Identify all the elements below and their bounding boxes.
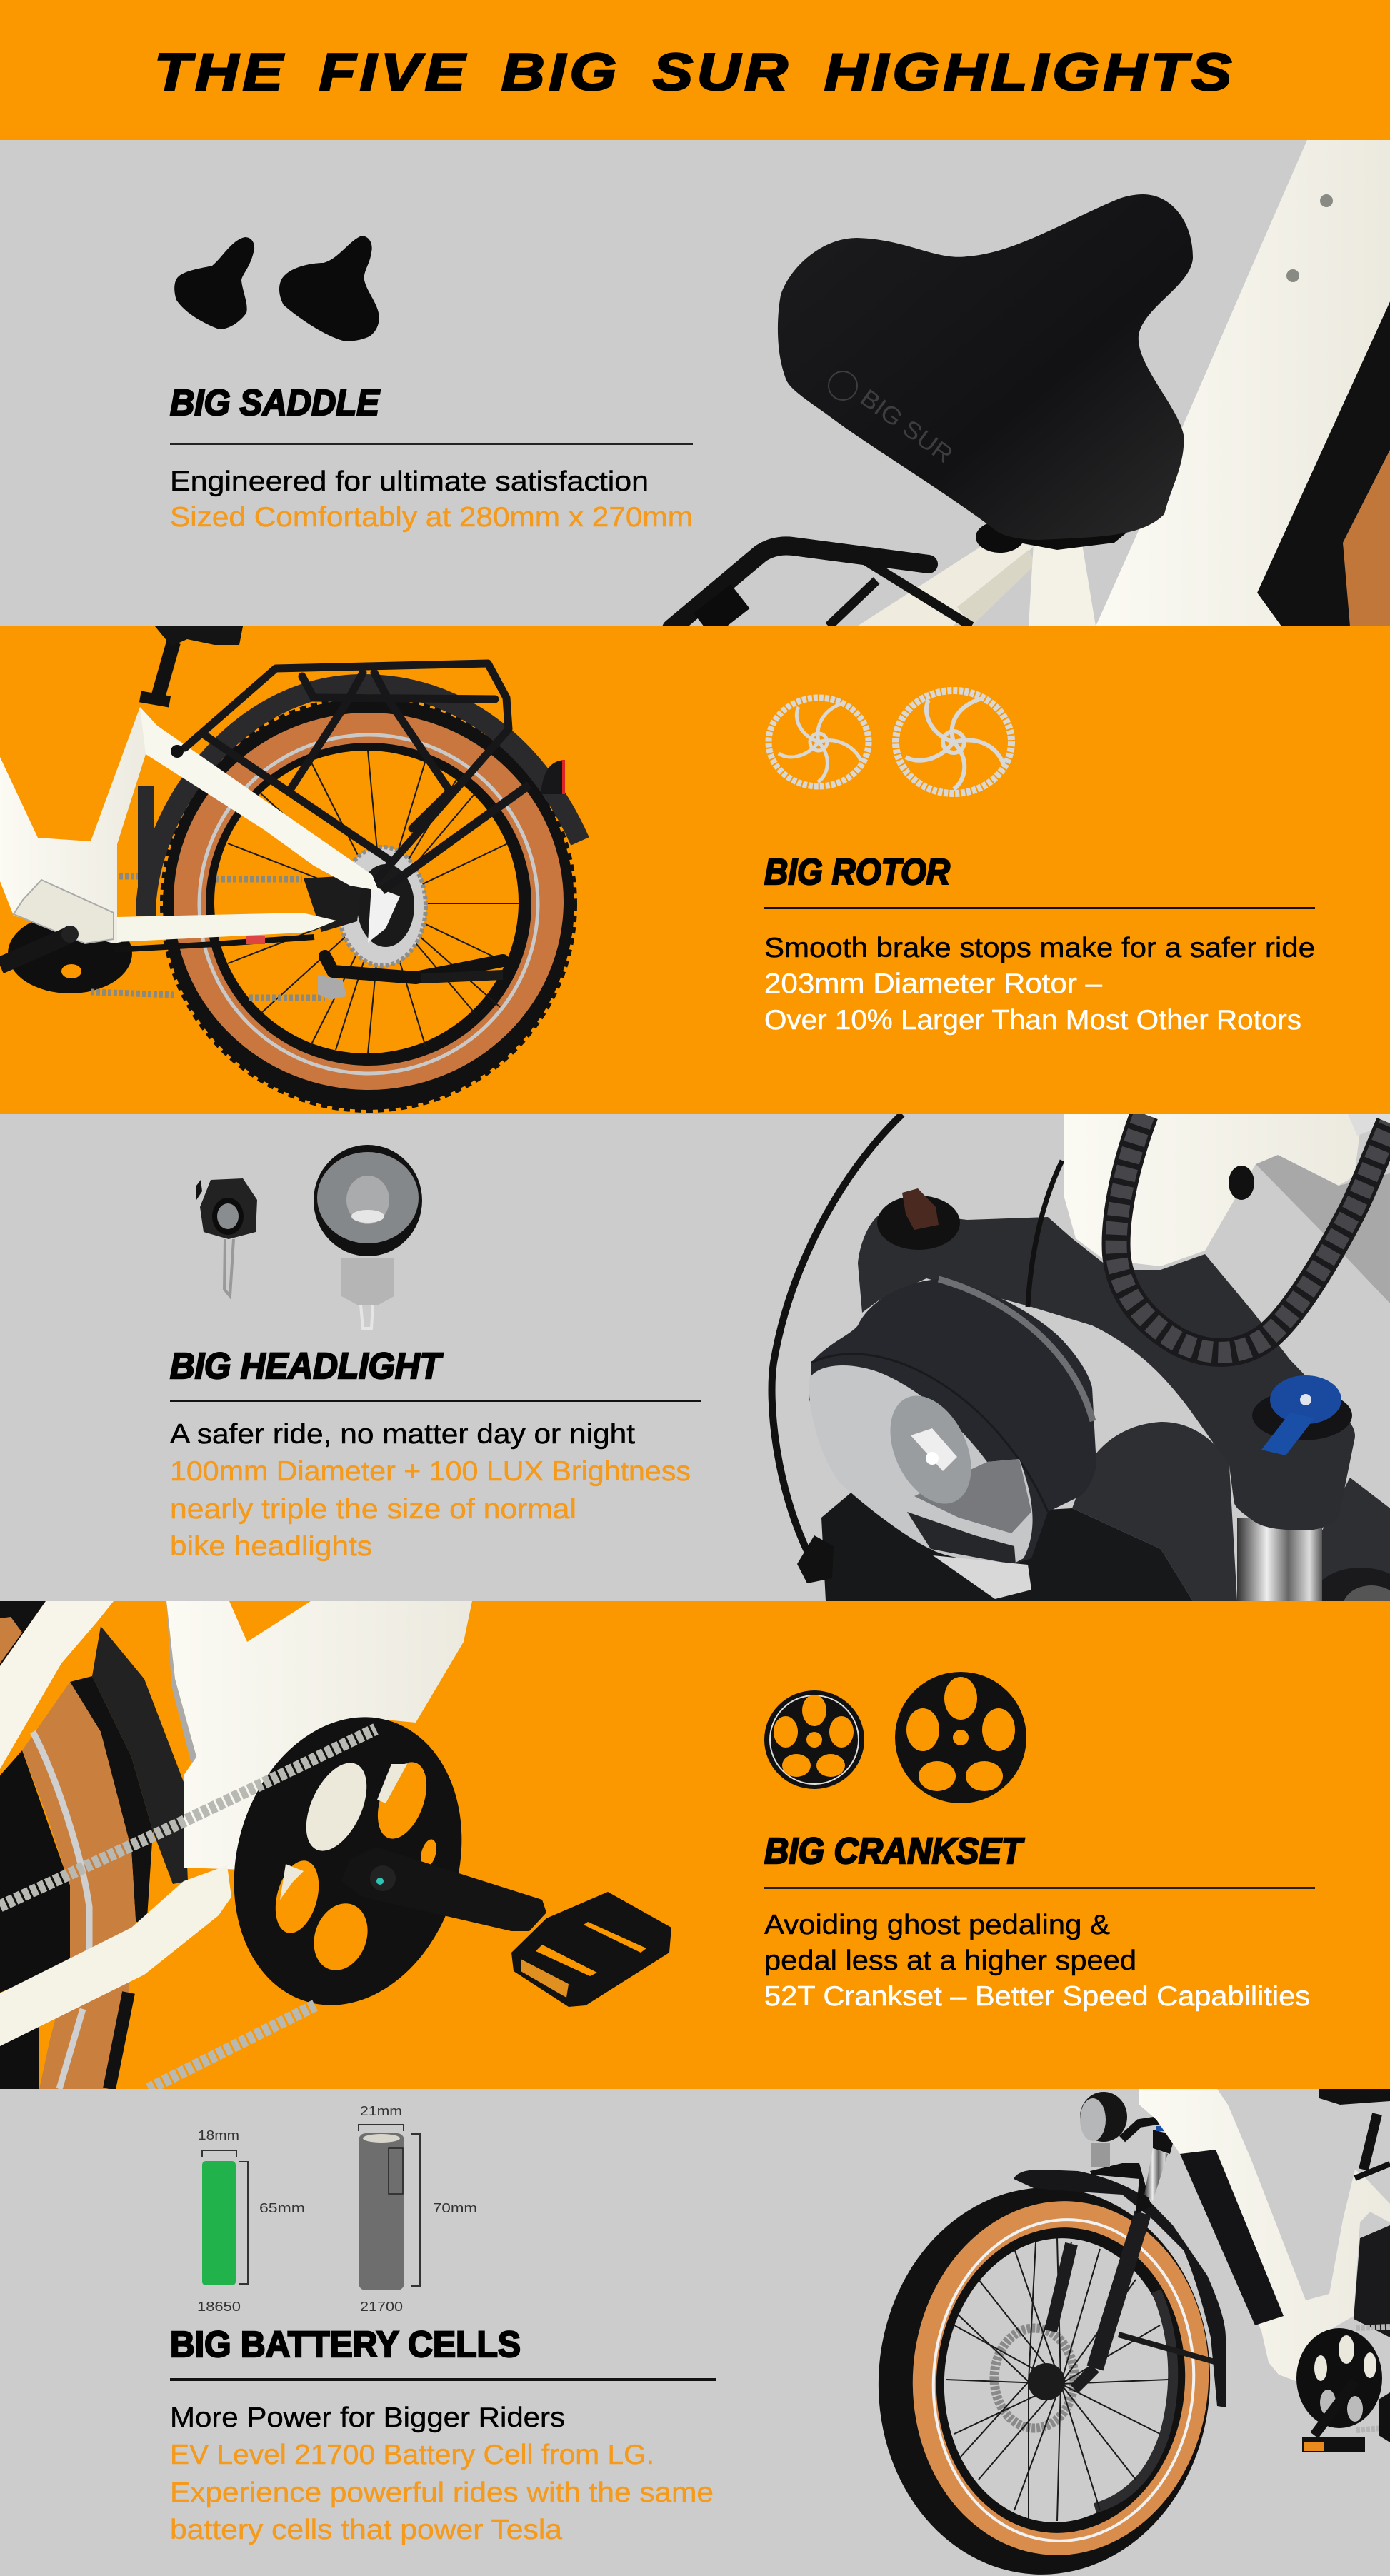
icon: small saddles [174, 236, 379, 341]
text: rotor description: Over 10% Larger Than Most Other Rotors [764, 1005, 1301, 1036]
text: rotor description: 203mm Diameter Rotor – [764, 968, 1102, 999]
icon: 21700 battery cell: 21mm [360, 2104, 402, 2118]
text: rotor description [764, 933, 1315, 1036]
text: rotor description: Smooth brake stops make for a safer ride [764, 933, 1315, 963]
text: crankset description: pedal less at a higher speed [764, 1945, 1136, 1976]
text: saddle description [170, 466, 693, 533]
panel: big rotor [0, 626, 1390, 1114]
photo: saddle on bike frame: BIG SUR [855, 384, 958, 469]
heading: big crankset: BIG CRANKSET [764, 1830, 1025, 1871]
icon: 21700 battery cell [359, 2104, 477, 2314]
panel: big headlight [170, 1114, 1390, 1601]
photo: headlight on stem [772, 1114, 1390, 1632]
text: headlight description [170, 1419, 691, 1562]
photo: saddle on bike frame [671, 140, 1390, 638]
text: battery description [170, 2402, 714, 2545]
icon: 21700 battery cell: 21700 [360, 2300, 403, 2314]
text: headlight description: A safer ride, no matter day or night [170, 1419, 635, 1450]
heading: big battery cells: BIG BATTERY CELLS [170, 2324, 521, 2365]
photo: front wheel and frame [869, 2089, 1390, 2576]
title banner [0, 0, 1390, 140]
photo: rear wheel with rack [0, 626, 580, 1111]
icon: 18650 battery cell [197, 2128, 305, 2314]
text: battery description: Experience powerful rides with the same [170, 2477, 714, 2508]
text: battery description: More Power for Bigger Riders [170, 2402, 565, 2433]
text: crankset description: 52T Crankset – Better Speed Capabilities [764, 1981, 1310, 2012]
text: saddle description: Sized Comfortably at 280mm x 270mm [170, 502, 693, 533]
panel: big battery cells [170, 2089, 1390, 2575]
icon: 18650 battery cell: 18mm [198, 2128, 239, 2143]
icon: 18650 battery cell: 65mm [259, 2201, 305, 2215]
icon: small headlights [196, 1145, 422, 1328]
title: THE FIVE BIG SUR HIGHLIGHTS [154, 44, 1236, 101]
icon: two brake rotors [769, 691, 1011, 793]
heading: big rotor: BIG ROTOR [764, 851, 950, 892]
text: crankset description [764, 1910, 1310, 2012]
icon: 21700 battery cell: 70mm [433, 2201, 477, 2215]
heading: big saddle: BIG SADDLE [170, 382, 381, 423]
text: headlight description: nearly triple the size of normal [170, 1494, 576, 1525]
text: headlight description: bike headlights [170, 1531, 372, 1562]
photo: chainring, crank and pedal [0, 1601, 671, 2089]
text: headlight description: 100mm Diameter + 100 LUX Brightness [170, 1456, 691, 1487]
icon: 18650 battery cell: 18650 [197, 2300, 241, 2314]
text: battery description: battery cells that power Tesla [170, 2515, 562, 2545]
panel: big saddle [170, 140, 1390, 626]
heading: big headlight: BIG HEADLIGHT [170, 1345, 444, 1386]
text: saddle description: Engineered for ultimate satisfaction [170, 466, 649, 497]
text: battery description: EV Level 21700 Battery Cell from LG. [170, 2440, 654, 2470]
panel: big crankset [0, 1601, 1390, 2089]
text: crankset description: Avoiding ghost pedaling & [764, 1910, 1110, 1940]
icon: small chainrings [764, 1672, 1026, 1803]
